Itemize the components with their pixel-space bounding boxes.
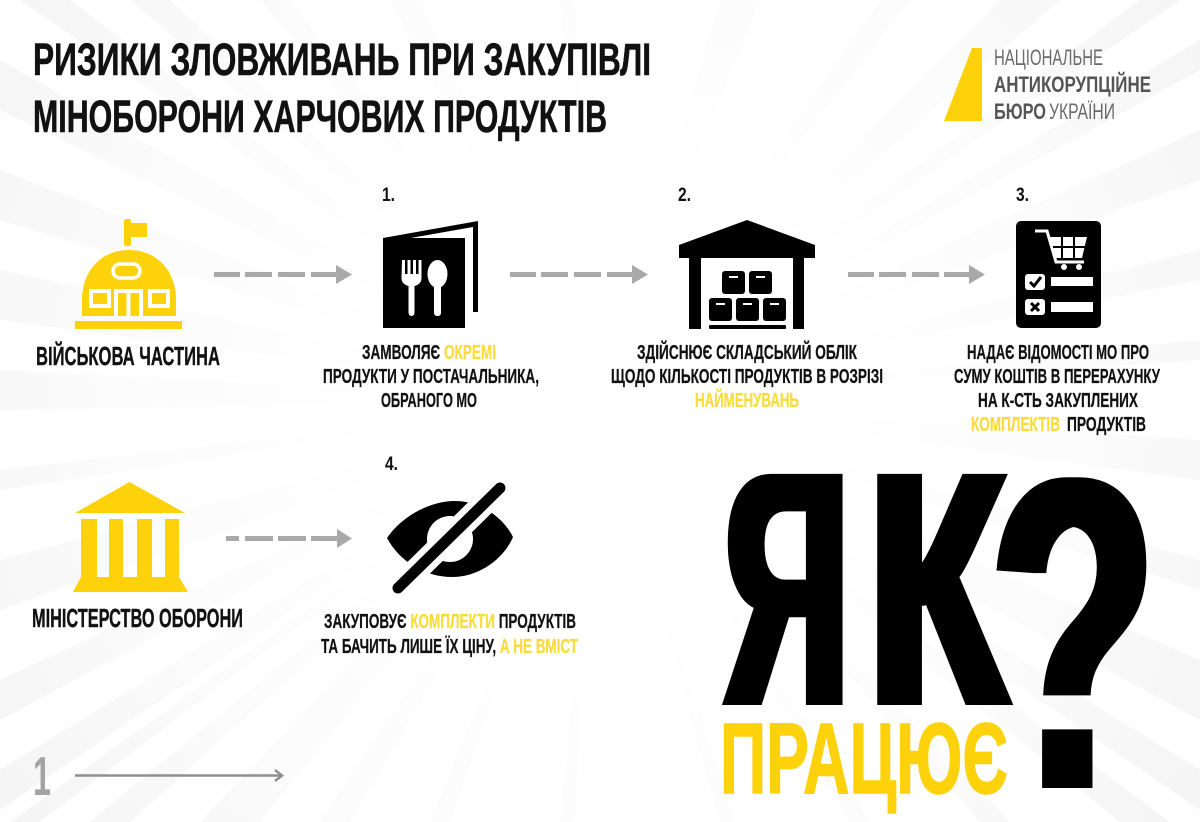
icon: crossed eye <box>386 476 513 600</box>
arrow: ministry to step 4 <box>226 529 352 548</box>
arrow: next page <box>75 770 282 781</box>
label: ministry of defence: МІНІСТЕРСТВО ОБОРОНИ <box>32 603 243 633</box>
icon: menu <box>383 221 478 328</box>
number 4: 4. <box>385 454 398 475</box>
step 4 text <box>321 611 578 658</box>
logo: National Anti-Corruption Bureau: БЮРО <box>994 99 1046 124</box>
label: military unit: ВІЙСЬКОВА ЧАСТИНА <box>36 341 220 371</box>
number 2: 2. <box>678 185 691 206</box>
title <box>33 34 651 142</box>
logo: National Anti-Corruption Bureau <box>944 45 1151 124</box>
number 1: 1. <box>382 185 395 206</box>
logo: National Anti-Corruption Bureau: УКРАЇНИ <box>1049 99 1115 124</box>
step 1 text: ОБРАНОГО МО <box>381 390 477 412</box>
step 1 text: ПРОДУКТИ У ПОСТАЧАЛЬНИКА, <box>323 366 539 388</box>
step 2 text: НАЙМЕНУВАНЬ <box>695 388 799 412</box>
icon: military unit building <box>75 219 182 329</box>
logo: National Anti-Corruption Bureau: АНТИКОРУПЦІЙНЕ <box>994 72 1151 97</box>
title: МІНОБОРОНИ ХАРЧОВИХ ПРОДУКТІВ <box>33 91 607 142</box>
number 3: 3. <box>1016 185 1029 206</box>
arrow: unit to step 1 <box>214 265 352 284</box>
title: РИЗИКИ ЗЛОВЖИВАНЬ ПРИ ЗАКУПІВЛІ <box>33 34 651 85</box>
step 2 text: ЗДІЙСНЮЄ СКЛАДСЬКИЙ ОБЛІК <box>637 340 858 364</box>
big heading: how: Я <box>725 402 848 777</box>
step 2 text: ЩОДО КІЛЬКОСТІ ПРОДУКТІВ В РОЗРІЗІ <box>611 366 883 388</box>
step 4 text: ТА БАЧИТЬ ЛИШЕ ЇХ ЦІНУ, А НЕ ВМІСТ <box>321 635 578 658</box>
step 3 text <box>954 342 1160 436</box>
arrow: step 2 to step 3 <box>848 265 985 284</box>
icon: ministry building <box>73 482 188 592</box>
arrow: step 1 to step 2 <box>510 265 648 284</box>
step 1 text: ЗАМВОЛЯЄ ОКРЕМІ <box>362 342 496 364</box>
step 3 text: КОМПЛЕКТІВ <box>971 414 1060 436</box>
page number: 1 <box>33 745 51 807</box>
icon: shopping cart checklist <box>1016 221 1101 328</box>
step 4 text: ЗАКУПОВУЄ КОМПЛЕКТИ ПРОДУКТІВ <box>324 611 576 633</box>
big heading: how: К <box>868 402 1010 777</box>
step 3 text: ПРОДУКТІВ <box>1067 414 1146 436</box>
big heading: how <box>725 386 1156 822</box>
step 2 text <box>611 340 883 412</box>
step 1 text <box>323 342 539 412</box>
big heading: works: ПРАЦЮЄ <box>720 703 1008 815</box>
icon: warehouse <box>679 220 815 329</box>
logo: National Anti-Corruption Bureau: НАЦІОНАЛЬНЕ <box>994 45 1103 70</box>
